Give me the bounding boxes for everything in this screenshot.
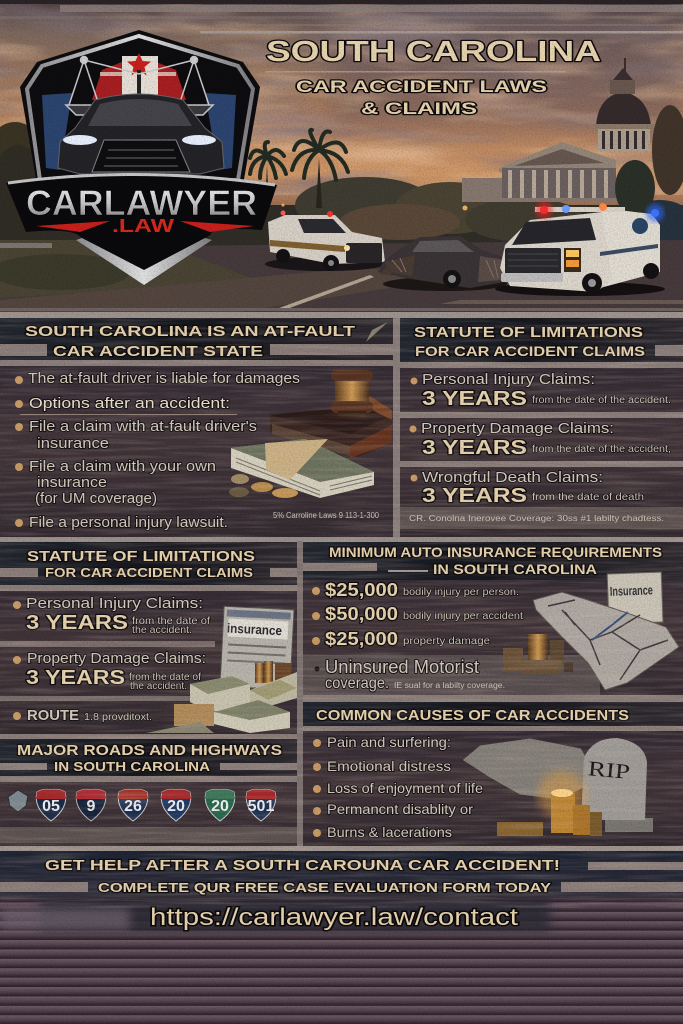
shield 26 (118, 789, 148, 821)
minimum coverage list: IE sual for a labilty coverage. (394, 681, 505, 690)
bullet list: The at-fault driver is liable for damages (28, 370, 300, 387)
heading: IN SOUTH CAROLINA (433, 561, 597, 577)
panel: call to action (0, 851, 683, 1024)
shield 20 green: 20 (211, 798, 229, 815)
subheading: COMPLETE QUR FREE CASE EVALUATION FORM TODAY (98, 880, 551, 895)
property damage item: from the date of (129, 672, 201, 683)
wrongful death item (410, 469, 644, 507)
harm bullet list: Pain and surfering: (327, 734, 451, 750)
shield 501 (246, 789, 276, 821)
heading: MINIMUM AUTO INSURANCE REQUIREMENTS (329, 544, 662, 560)
panel: common causes (303, 702, 683, 846)
personal injury item: Personal Injury Claims: (26, 595, 203, 612)
heading: STATUTE OF LIMITATIONS (414, 324, 643, 341)
divider band (0, 846, 683, 851)
minimum coverage list: $25,000 (325, 629, 398, 649)
route item: 1.8 provditoxt. (84, 712, 152, 723)
shield 20 green (205, 789, 235, 821)
footnote: CR. Conolna Inerovee Coverage: 30ss #1 labilty chadtess. (409, 514, 664, 523)
icon: cash stack and coins (229, 439, 374, 498)
minimum coverage list: Uninsured Motorist (325, 657, 479, 677)
heading: STATUTE OF LIMITATIONS (27, 548, 255, 565)
minimum coverage list: property damage (403, 636, 490, 647)
wrongful death item: from the date of death (532, 492, 644, 503)
panel: statute of limitations right (400, 318, 683, 537)
divider band (0, 537, 683, 542)
icon: insurance document (220, 606, 294, 690)
heading: FOR CAR ACCIDENT CLAIMS (45, 565, 253, 580)
logo banner: .LAW (112, 216, 174, 236)
bullet list: insurance (37, 474, 107, 491)
property damage item: Property Damage Claims: (421, 420, 614, 437)
title: & CLAIMS (361, 99, 477, 118)
shield 05 (36, 789, 66, 821)
harm bullet list: Permancnt disablity or (327, 801, 473, 817)
highway shields (36, 789, 276, 821)
heading: IN SOUTH CAROLINA (54, 759, 211, 774)
panel: at-fault state (0, 318, 393, 537)
heading (414, 324, 645, 359)
property damage item (13, 650, 206, 692)
icon: wrecked car (378, 236, 507, 291)
minimum coverage list: $25,000 (325, 580, 398, 600)
logo: CarLawyer.Law shield (6, 30, 277, 285)
property damage item: from the date of the accident, (532, 444, 671, 455)
bullet list (15, 370, 300, 531)
property damage item: Property Damage Claims: (27, 650, 206, 667)
bullet list: Options after an accident: (29, 395, 230, 412)
icon: police SUV (265, 210, 385, 271)
personal injury item (410, 371, 671, 410)
heading (27, 548, 255, 580)
personal injury item: Personal Injury Claims: (422, 371, 595, 388)
title (266, 36, 601, 118)
icon: RIP tombstone (581, 738, 653, 832)
route item (13, 707, 152, 724)
minimum coverage list: bodily injury per person. (403, 587, 519, 598)
logo banner (6, 173, 277, 285)
vertical divider (297, 541, 303, 847)
personal injury item: 3 YEARS (26, 612, 128, 634)
heading (25, 323, 355, 360)
divider band under hero (0, 312, 683, 318)
icon: gavel on law book (270, 370, 392, 458)
divider band (303, 695, 683, 702)
bullet list: File a claim with at-fault driver's (29, 418, 257, 435)
contact URL: https://carlawyer.law/contact (150, 904, 518, 931)
citation: 5% Carroline Laws 9 113-1-300 (273, 511, 380, 520)
wrongful death item: Wrongful Death Claims: (422, 469, 603, 486)
blue side panels (42, 93, 236, 170)
heading: FOR CAR ACCIDENT CLAIMS (415, 343, 645, 359)
minimum coverage list (312, 580, 523, 692)
personal injury item: the accident. (132, 625, 192, 636)
bullet list: File a claim with your own (29, 458, 216, 475)
property damage item: 3 YEARS (422, 437, 527, 459)
harm bullet list: Burns & lacerations (327, 824, 452, 840)
icon: insurance document: insurance (227, 620, 282, 638)
title: SOUTH CAROLINA (266, 36, 601, 68)
personal injury item: 3 YEARS (422, 388, 527, 410)
heading: CAR ACCIDENT STATE (53, 343, 263, 360)
car front (58, 94, 224, 174)
bullet list: File a personal injury lawsuit. (29, 514, 228, 531)
flag crest with star (92, 53, 186, 100)
vertical divider (393, 318, 400, 537)
icon: state badge (8, 790, 28, 812)
shield 501: 501 (248, 798, 274, 815)
shield 26: 26 (124, 798, 142, 815)
logo banner: CARLAWYER (26, 184, 257, 223)
personal injury item (13, 595, 210, 636)
panel: hero scene (0, 0, 683, 312)
property damage item: the accident. (130, 681, 187, 692)
shield 9: 9 (87, 798, 96, 815)
harm bullet list: Emotional distress (327, 758, 451, 774)
trees along the horizon (0, 122, 683, 255)
shield 20: 20 (167, 798, 185, 815)
harm bullet list (313, 734, 483, 840)
icon: insurance document: Insurance (610, 582, 653, 599)
route item: ROUTE (27, 707, 79, 724)
icon: cracked state map (462, 738, 600, 800)
heading: SOUTH CAROLINA IS AN AT-FAULT (25, 323, 355, 340)
icon: palm trees (250, 130, 348, 208)
shield 20 (161, 789, 191, 821)
property damage item: 3 YEARS (26, 667, 125, 689)
title: CAR ACCIDENT LAWS (296, 77, 547, 96)
icon: candles and coins (497, 771, 602, 836)
heading (329, 544, 662, 577)
heading: COMMON CAUSES OF CAR ACCIDENTS (316, 707, 629, 724)
icon: dart (366, 322, 388, 342)
icon: South Carolina map (533, 592, 679, 690)
minimum coverage list: $50,000 (325, 604, 398, 624)
icon: ambulance (495, 201, 665, 296)
icon: insurance document (607, 572, 663, 624)
icon: coin stacks (503, 634, 573, 674)
heading (17, 742, 282, 774)
shield 9 (76, 789, 106, 821)
minimum coverage list: bodily injury per accident (403, 611, 523, 622)
property damage item (410, 420, 671, 459)
bullet list: insurance (37, 435, 109, 452)
minimum coverage list: coverage. (325, 675, 389, 692)
icon: cash stacks (146, 661, 297, 733)
personal injury item: from the date of the accident. (532, 395, 671, 406)
heading: MAJOR ROADS AND HIGHWAYS (17, 742, 282, 759)
scales of justice (66, 56, 213, 115)
harm bullet list: Loss of enjoyment of life (327, 780, 483, 796)
personal injury item: from the date of (132, 616, 210, 627)
heading: GET HELP AFTER A SOUTH CAROUNA CAR ACCIDENT! (45, 857, 560, 874)
panel: statute of limitations left (0, 542, 297, 734)
bullet list: (for UM coverage) (35, 490, 157, 507)
panel: minimum auto insurance (303, 542, 683, 695)
icon: RIP tombstone: RIP (587, 756, 631, 784)
panel: major roads and highways (0, 734, 297, 846)
road and ground (0, 240, 683, 312)
shield 05: 05 (42, 798, 60, 815)
icon: state house with dome (462, 58, 683, 216)
wrongful death item: 3 YEARS (422, 485, 527, 507)
